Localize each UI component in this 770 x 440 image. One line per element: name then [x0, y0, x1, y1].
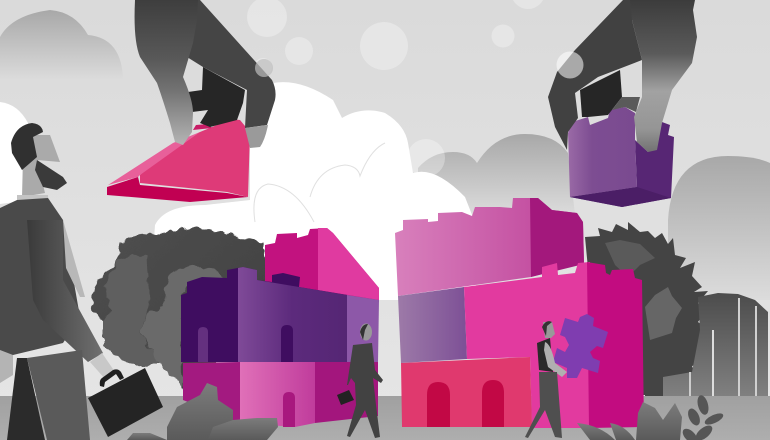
hand back and finger — [548, 0, 642, 150]
knuckle highlight left — [255, 59, 273, 77]
window slots — [198, 327, 208, 362]
hot pink block — [464, 262, 590, 428]
palm dark inner — [188, 67, 245, 127]
trousers — [27, 350, 90, 440]
coral pink block — [401, 357, 532, 427]
collar — [17, 195, 48, 201]
tie / lapel — [63, 220, 85, 297]
hand back and fingers — [187, 0, 276, 128]
small man walking with briefcase — [337, 324, 383, 438]
left hand — [135, 0, 276, 148]
upper pink long block — [395, 198, 584, 296]
arch doors — [427, 382, 450, 427]
red roof block held by left hand — [107, 119, 250, 202]
large man with briefcase — [0, 123, 163, 440]
grey purple block — [398, 287, 467, 363]
purple block side — [181, 267, 347, 362]
ground — [0, 396, 770, 440]
left bush — [91, 227, 270, 392]
right hand — [548, 0, 697, 152]
plants foreground right — [577, 402, 682, 440]
right tree — [585, 222, 716, 395]
white cloud behind man — [0, 102, 31, 204]
white central cloud — [150, 82, 476, 300]
top pink block — [265, 228, 379, 302]
briefcase — [88, 368, 163, 437]
cloud outlines — [254, 143, 385, 222]
right block tower — [395, 198, 644, 428]
left block tower — [181, 228, 379, 427]
knuckle highlight — [556, 52, 584, 78]
beard — [35, 160, 67, 190]
bokeh circles — [247, 0, 545, 177]
palm dark inner — [580, 70, 622, 117]
index finger — [135, 0, 198, 145]
arm — [27, 220, 103, 362]
bush foreground left — [127, 383, 278, 440]
bottom magenta block — [183, 362, 240, 423]
magenta side — [587, 262, 644, 428]
puzzle piece — [553, 314, 608, 378]
hair — [11, 123, 43, 170]
plant sprig — [680, 394, 725, 440]
purple block held by right hand — [568, 107, 674, 207]
man carrying puzzle — [525, 321, 567, 438]
neck and face — [22, 135, 60, 197]
hand — [90, 353, 115, 380]
fence — [645, 293, 768, 396]
front finger — [630, 0, 697, 152]
torso — [0, 198, 80, 355]
